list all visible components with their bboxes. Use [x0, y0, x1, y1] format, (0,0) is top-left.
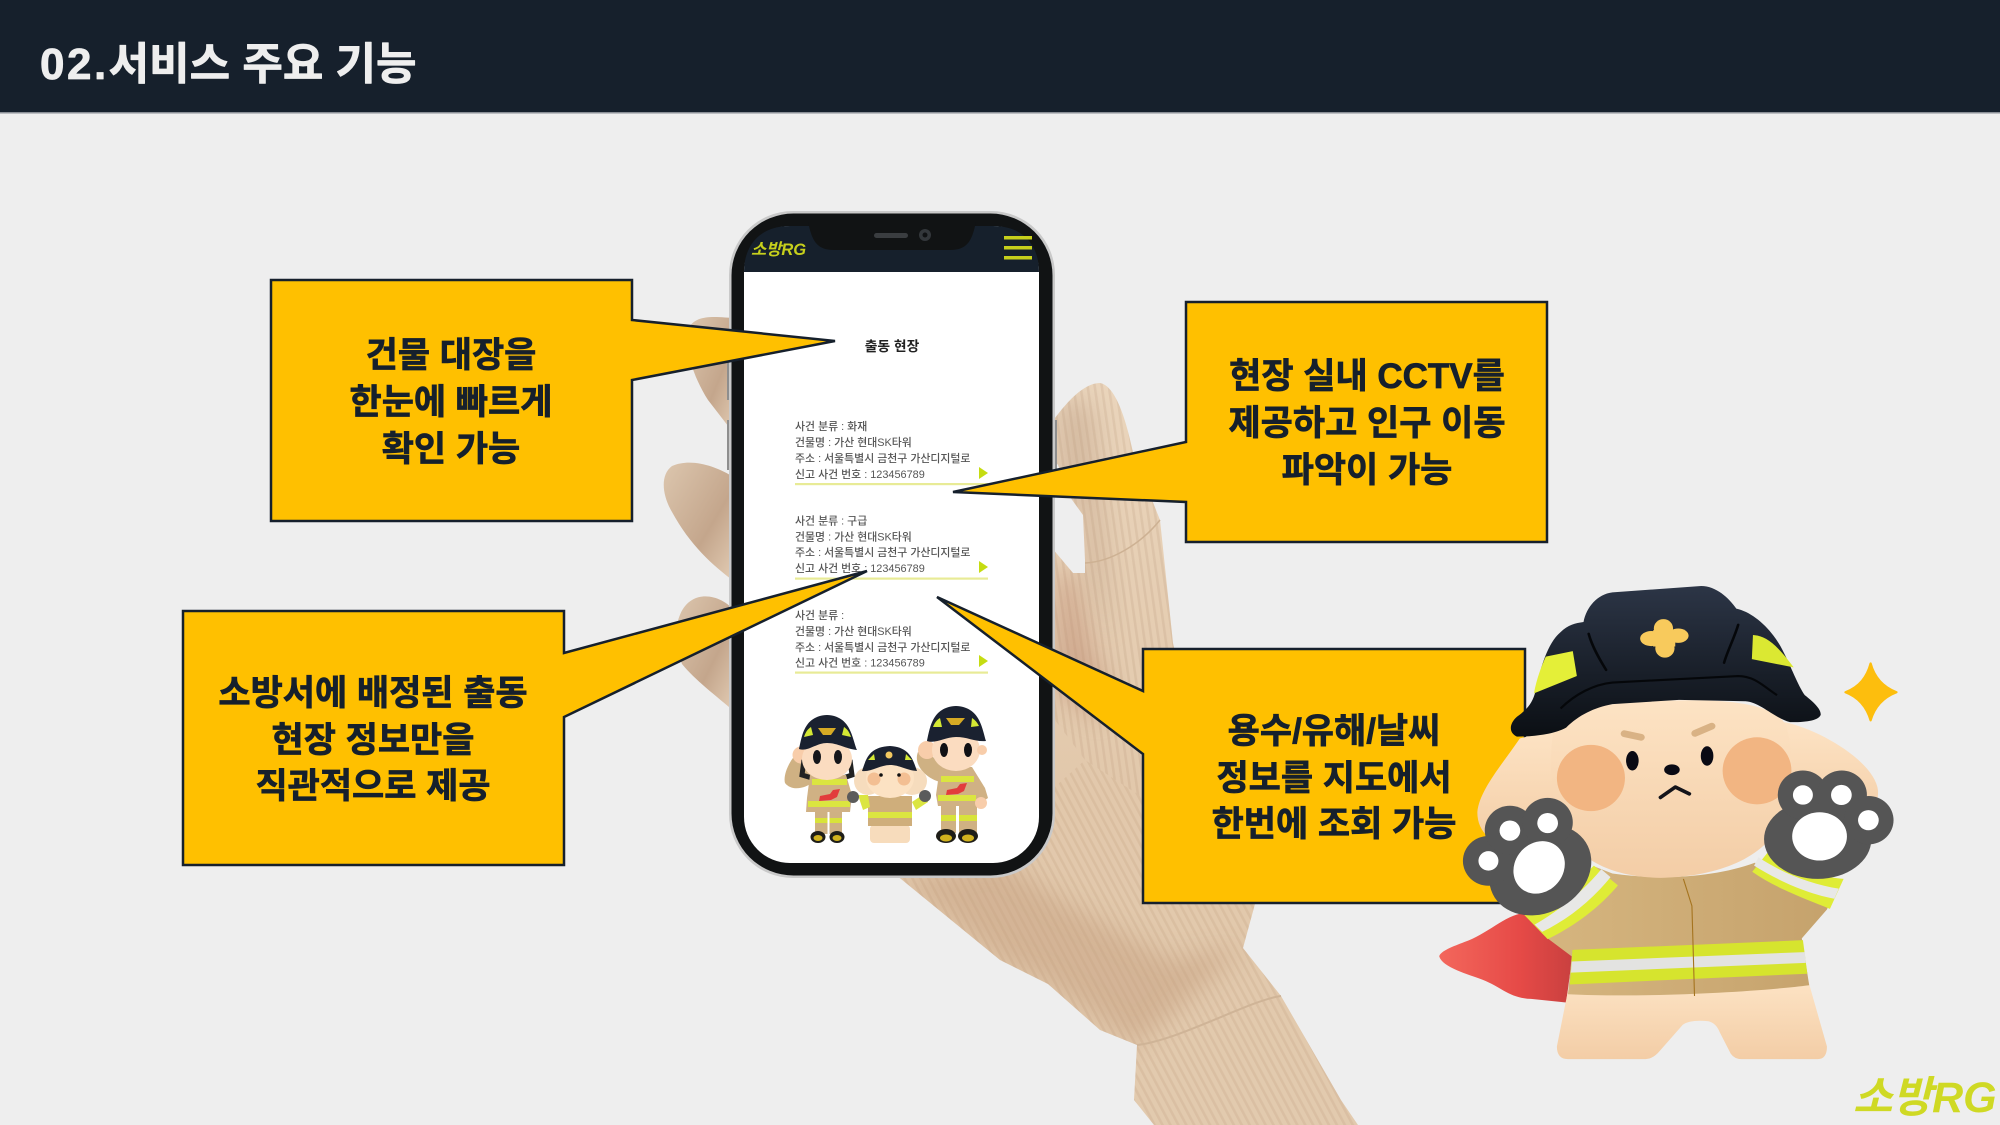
jacket: [1524, 850, 1844, 996]
wooden hand: [664, 317, 1400, 1125]
ears: [1477, 722, 1878, 848]
callout: map lookup: 용수/유해/날씨: [1228, 712, 1440, 751]
callout: indoor CCTV: [953, 302, 1547, 542]
incident card 2: 주소 : 서울특별시 금천구 가산디지털로: [795, 545, 970, 559]
legs: [1557, 982, 1827, 1059]
left finger middle: [664, 463, 735, 582]
character: boy firefighter: [917, 706, 988, 843]
incident card 2: 신고 사건 번호 : 123456789: [795, 562, 925, 575]
incident card 1: 사건 분류 : 화재: [795, 420, 867, 433]
incident card 2: 건물명 : 가산 현대SK타워: [795, 530, 912, 544]
app logo: 소방RG: [751, 241, 806, 259]
callout: building register: 건물 대장을: [366, 336, 536, 375]
incident card 1: [795, 420, 988, 485]
callout: building register: [271, 280, 835, 521]
character: puppy firefighter: [847, 746, 931, 843]
callout: map lookup: 한번에 조회 가능: [1212, 805, 1456, 844]
palm shadow: [912, 870, 1229, 1044]
incident card 3: 건물명 : 가산 현대SK타워: [795, 624, 912, 638]
smartphone: [727, 211, 1057, 878]
incident card 3: 사건 분류 :: [795, 609, 844, 622]
incident card 1: 신고 사건 번호 : 123456789: [795, 468, 925, 481]
screen: [744, 226, 1039, 863]
callout: indoor CCTV: 파악이 가능: [1282, 451, 1452, 490]
phone body: [729, 211, 1055, 878]
left finger top: [687, 317, 735, 435]
incident card 2: 사건 분류 : 구급: [795, 514, 867, 528]
finger shadow: [1056, 565, 1110, 720]
incident card 3: 주소 : 서울특별시 금천구 가산디지털로: [795, 640, 970, 654]
side buttons: [727, 350, 1057, 490]
callout: dispatch info: 직관적으로 제공: [255, 767, 491, 806]
character: girl firefighter: [785, 715, 857, 843]
incident card 3: [795, 609, 988, 674]
callout: building register: 확인 가능: [382, 430, 520, 469]
callout: dispatch info: 현장 정보만을: [272, 721, 474, 760]
screen heading: 출동 현장: [865, 339, 920, 354]
callout: map lookup: [937, 597, 1525, 903]
title: 02.서비스 주요 기능: [40, 40, 416, 89]
callout: map lookup: 정보를 지도에서: [1216, 759, 1452, 798]
brand logo: 소방RG: [1853, 1074, 1997, 1122]
wrist crease: [1137, 996, 1281, 1045]
callout: dispatch info: 소방서에 배정된 출동: [218, 674, 528, 713]
hamburger menu: [1004, 236, 1032, 260]
helmet: [1511, 586, 1821, 737]
head: [1551, 700, 1792, 878]
callout: indoor CCTV: 현장 실내 CCTV를: [1229, 357, 1505, 396]
left finger bottom: [676, 596, 735, 712]
app top bar: [744, 226, 1039, 272]
incident card 2: [795, 514, 988, 580]
left paw: [1463, 798, 1609, 934]
incident card 3: 신고 사건 번호 : 123456789: [795, 656, 925, 670]
incident card 1: 건물명 : 가산 현대SK타워: [795, 435, 912, 449]
sparkle star: [1845, 663, 1897, 720]
callout: dispatch info: [183, 571, 867, 865]
mascot: puppy firefighter: [1439, 586, 1897, 1059]
knuckle crease: [1085, 520, 1160, 563]
notch: [808, 222, 976, 250]
header bar: [0, 0, 2000, 114]
callout: building register: 한눈에 빠르게: [350, 383, 552, 422]
cape: [1439, 913, 1572, 1003]
back of hand and wrist: [900, 383, 1358, 1125]
callout: indoor CCTV: 제공하고 인구 이동: [1228, 404, 1506, 443]
incident card 1: 주소 : 서울특별시 금천구 가산디지털로: [795, 451, 970, 465]
right paw: [1764, 770, 1894, 879]
